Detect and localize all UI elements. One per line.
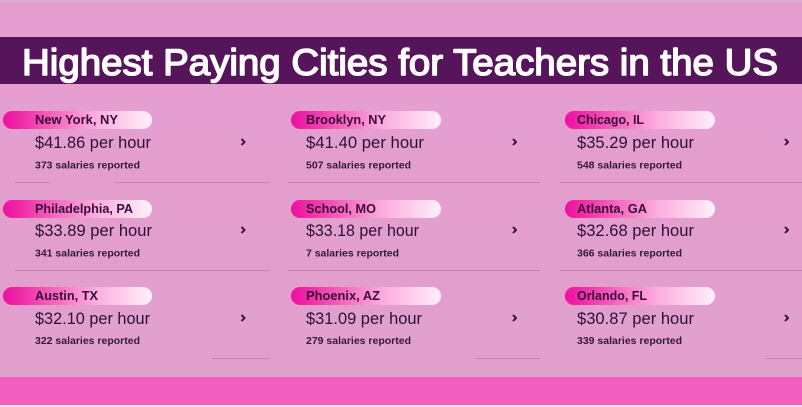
card: School: 7 salaries reported [306, 248, 399, 260]
card: New York: $41.86 per hour [35, 133, 151, 152]
card: Brooklyn: Brooklyn, NY [306, 113, 387, 127]
card: Orlando: 339 salaries reported [577, 335, 682, 347]
card: Philadelphia: 341 salaries reported [35, 248, 140, 260]
card: Phoenix: 279 salaries reported [306, 335, 411, 347]
card: Phoenix: Phoenix, AZ [306, 289, 380, 303]
card: Chicago [560, 111, 802, 182]
bottom edge strip [0, 405, 802, 407]
card: Chicago: 548 salaries reported [577, 160, 682, 172]
card: Atlanta: $32.68 per hour [577, 221, 694, 240]
card: School: School, MO [306, 202, 376, 216]
card: New York: New York, NY [35, 113, 119, 127]
card: Orlando: Orlando, FL [577, 289, 647, 303]
card: Phoenix [291, 287, 540, 358]
card: Austin [3, 287, 270, 358]
card: Atlanta: Atlanta, GA [577, 202, 647, 216]
card: Brooklyn: $41.40 per hour [306, 133, 424, 152]
card: Chicago: $35.29 per hour [577, 133, 694, 152]
top edge strip [0, 0, 802, 2]
card: School: $33.18 per hour [306, 221, 419, 240]
card: Philadelphia: $33.89 per hour [35, 221, 152, 240]
card: Philadelphia: Philadelphia, PA [35, 202, 133, 216]
card: Atlanta [560, 200, 802, 270]
card: School [288, 200, 540, 270]
card: Austin: Austin, TX [35, 289, 99, 303]
card: Austin: 322 salaries reported [35, 335, 140, 347]
card: Chicago: Chicago, IL [577, 113, 644, 127]
card: Philadelphia [3, 200, 270, 270]
card: Brooklyn: 507 salaries reported [306, 160, 411, 172]
card: Austin: $32.10 per hour [35, 309, 150, 328]
card: Phoenix: $31.09 per hour [306, 309, 422, 328]
card: New York: 373 salaries reported [35, 160, 140, 172]
card: Orlando: $30.87 per hour [577, 309, 694, 328]
card: New York [3, 111, 270, 182]
bottom band [0, 377, 802, 405]
card: Atlanta: 366 salaries reported [577, 248, 682, 260]
card: Brooklyn [288, 111, 540, 182]
card: Orlando [565, 287, 802, 358]
title: Highest Paying Cities for Teachers in the US [22, 42, 778, 83]
title banner [0, 37, 802, 84]
